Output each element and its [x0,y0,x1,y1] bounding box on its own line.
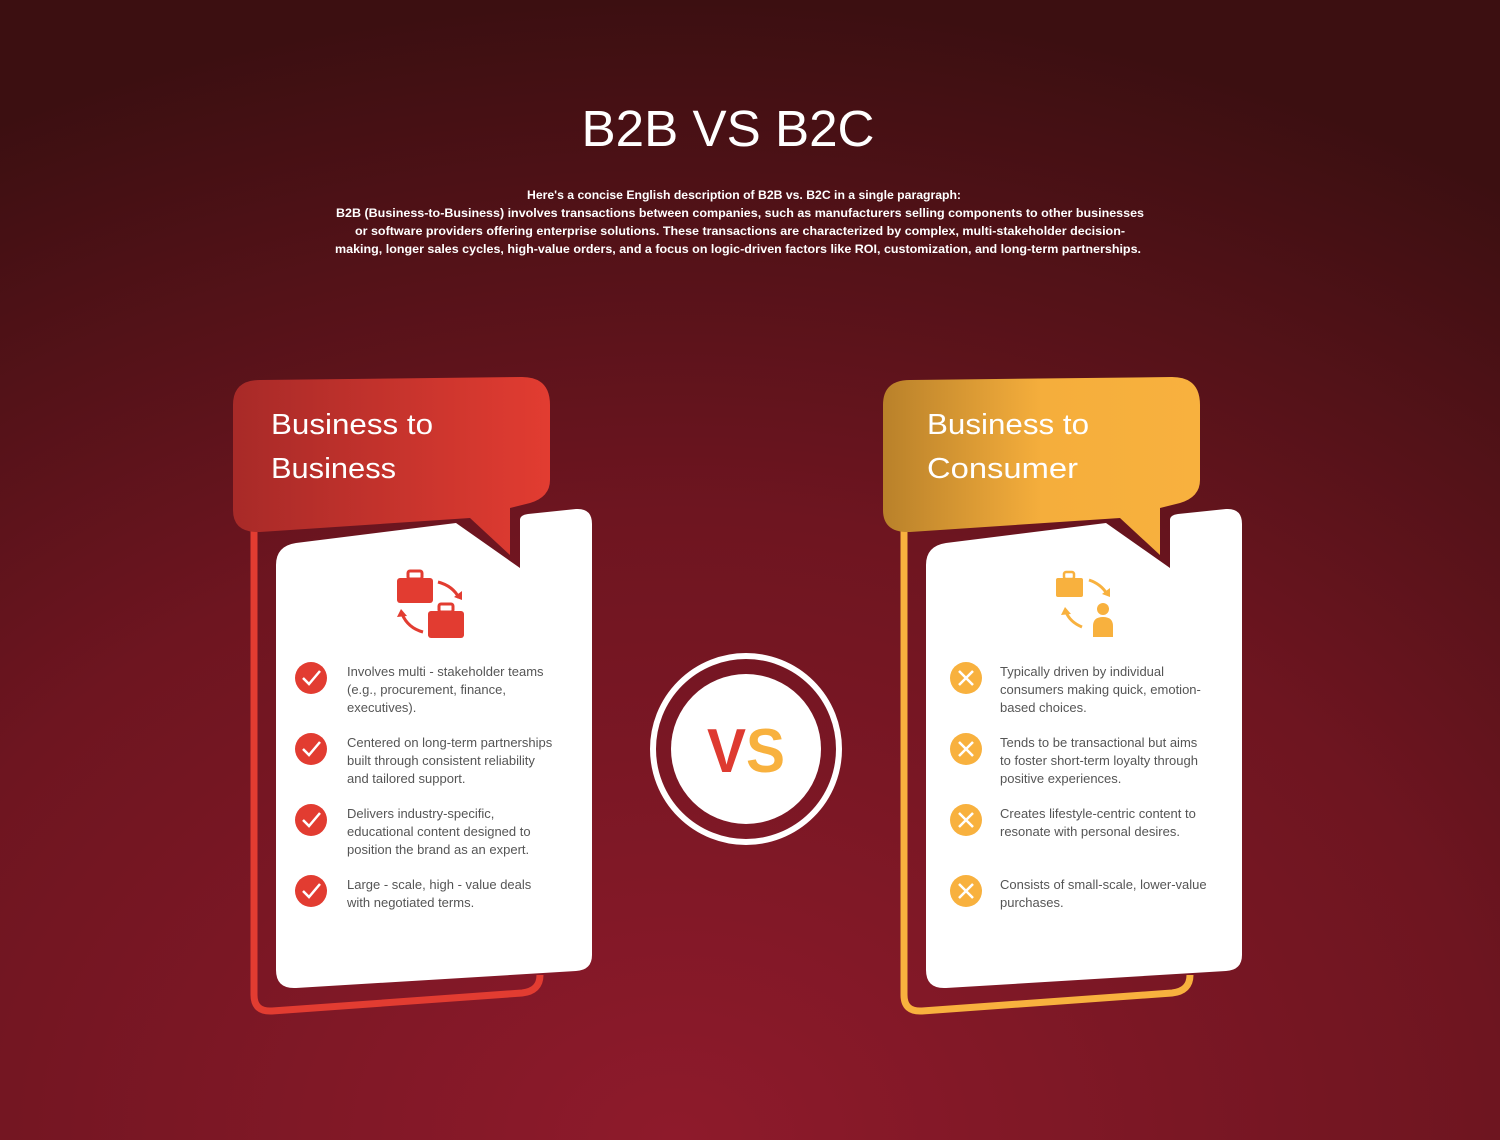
title: B2B VS B2C [582,100,874,157]
VS badge [653,656,839,842]
header bubble [883,377,1200,555]
header text: Business to [927,409,1089,441]
list: B2B items: Delivers industry-specific, [347,806,494,821]
list: B2B items: Large - scale, high - value deals [347,877,532,892]
list: B2B items: executives). [347,700,416,715]
description: Here's a concise English description of B2B vs. B2C in a single paragraph: [527,188,961,202]
VS badge: VS [707,717,785,786]
list: B2B items: educational content designed to [347,824,531,839]
description: making, longer sales cycles, high-value orders, and a focus on logic-driven factors like ROI, customization, and long-term partnerships. [335,242,1141,256]
icon: briefcases exchange [397,571,464,638]
list: B2B items: Centered on long-term partnerships [347,735,553,750]
list: B2C items: purchases. [1000,895,1064,910]
list: B2C items: consumers making quick, emotion- [1000,682,1201,697]
white card [276,509,592,988]
list: B2B items: position the brand as an expert. [347,842,529,857]
frame outline [904,530,1190,1011]
list: B2C items: Creates lifestyle-centric content to [1000,806,1196,821]
white card [926,509,1242,988]
panel: B2C: Consumer [927,453,1078,485]
list: B2C items: Tends to be transactional but aims [1000,735,1198,750]
list: B2B items: (e.g., procurement, finance, [347,682,506,697]
list: B2C items [950,662,1207,910]
list: B2C items: resonate with personal desires. [1000,824,1180,839]
description [335,188,1144,256]
panel: B2B: Business [271,453,396,485]
frame outline [254,530,540,1011]
panel: B2C [883,377,1242,1011]
list: B2B items [295,662,553,910]
list: B2C items: positive experiences. [1000,771,1121,786]
header text: Business to [271,409,433,441]
description: or software providers offering enterprise solutions. These transactions are characterized by complex, multi-stakeholder decision- [355,224,1125,238]
list: B2B items: built through consistent reliability [347,753,535,768]
list: B2C items: to foster short-term loyalty through [1000,753,1198,768]
panel: B2B [233,377,592,1011]
description: B2B (Business-to-Business) involves transactions between companies, such as manufacturers selling components to other businesses [336,206,1144,220]
list: B2C items: based choices. [1000,700,1087,715]
list: B2B items: Involves multi - stakeholder teams [347,664,544,679]
list: B2C items: Typically driven by individual [1000,664,1164,679]
list: B2B items: and tailored support. [347,771,466,786]
list: B2C items: Consists of small-scale, lower-value [1000,877,1207,892]
icon: business to consumer [1056,572,1113,637]
header bubble [233,377,550,555]
list: B2B items: with negotiated terms. [346,895,474,910]
